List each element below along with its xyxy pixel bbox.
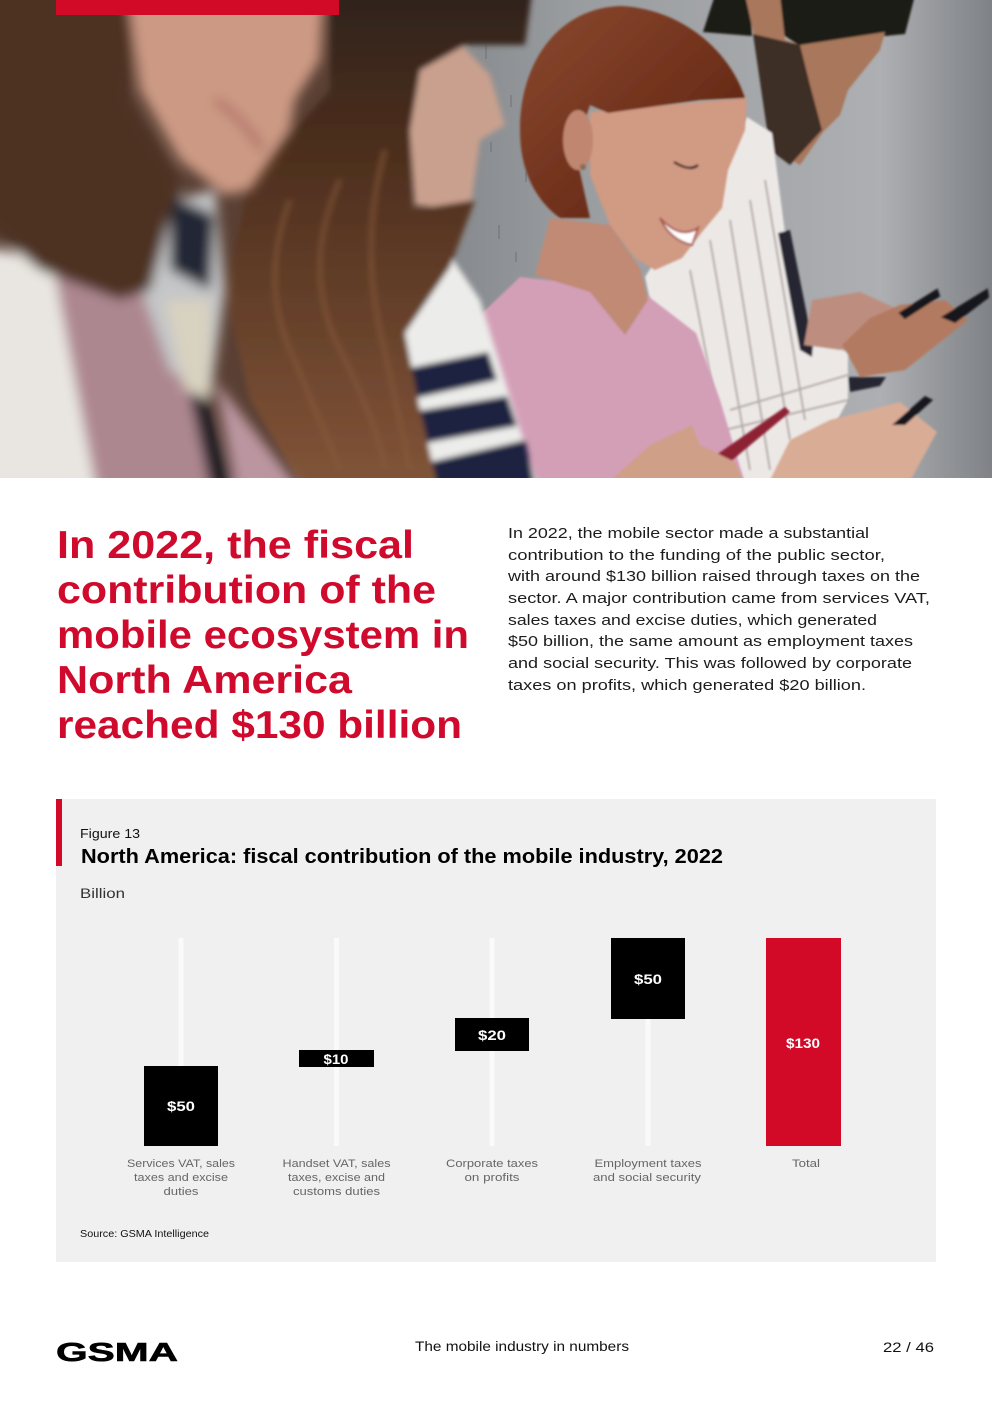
- category labels: Corporate taxes: [446, 1158, 539, 1170]
- page number: 22 / 46: [883, 1340, 934, 1355]
- logo: GSMA: GSMA: [56, 1337, 178, 1367]
- hands and phones at the front: [612, 394, 938, 478]
- red tab: [56, 0, 339, 15]
- body text: sector. A major contribution came from services VAT,: [508, 590, 930, 607]
- heading: In 2022, the fiscal: [57, 524, 414, 567]
- body text: and social security. This was followed by corporate: [508, 655, 912, 672]
- body text: with around $130 billion raised through taxes on the: [507, 568, 920, 585]
- heading: contribution of the: [57, 569, 436, 612]
- body text: $50 billion, the same amount as employment taxes: [508, 633, 913, 650]
- category labels: taxes and excise: [134, 1172, 228, 1184]
- heading: reached $130 billion: [57, 704, 462, 747]
- category labels: Services VAT, sales: [127, 1158, 236, 1170]
- category labels: duties: [164, 1186, 199, 1198]
- source: Source: GSMA Intelligence: [80, 1229, 209, 1240]
- man in striped shirt: [645, 0, 988, 490]
- body text: In 2022, the mobile sector made a substantial: [508, 525, 869, 542]
- face: [590, 98, 747, 270]
- body text: sales taxes and excise duties, which generated: [508, 612, 877, 629]
- category labels: Employment taxes: [594, 1158, 702, 1170]
- bar chart: [127, 938, 841, 1198]
- bar chart: $20: [478, 1028, 506, 1043]
- figure label: Figure 13: [80, 826, 140, 841]
- second woman with long curly hair: [225, 0, 545, 510]
- category labels: Total: [792, 1158, 820, 1170]
- panel: figure 13: [56, 799, 936, 1262]
- bar chart: $50: [634, 972, 662, 987]
- category labels: [127, 1158, 820, 1198]
- neck: [535, 218, 648, 335]
- category labels: customs duties: [293, 1186, 381, 1198]
- heading: [57, 524, 469, 747]
- category labels: on profits: [464, 1172, 520, 1184]
- photo: four people looking at phones: [0, 0, 992, 510]
- category labels: taxes, excise and: [288, 1172, 385, 1184]
- body text: taxes on profits, which generated $20 billion.: [508, 677, 866, 694]
- unit label: Billion: [80, 885, 125, 901]
- figure title: North America: fiscal contribution of the mobile industry, 2022: [81, 846, 723, 868]
- category labels: Handset VAT, sales: [282, 1158, 391, 1170]
- body text: contribution to the funding of the public sector,: [508, 547, 885, 564]
- footer title: The mobile industry in numbers: [415, 1339, 629, 1354]
- bar chart: $50: [167, 1099, 195, 1114]
- bar chart: $130: [786, 1036, 820, 1051]
- category labels: and social security: [593, 1172, 702, 1184]
- heading: North America: [57, 659, 352, 702]
- bar chart: $10: [324, 1052, 348, 1067]
- red-haired woman in pink sweater: [475, 6, 747, 490]
- heading: mobile ecosystem in: [57, 614, 469, 657]
- body text: [507, 525, 930, 694]
- first woman in the foreground: [0, 0, 325, 510]
